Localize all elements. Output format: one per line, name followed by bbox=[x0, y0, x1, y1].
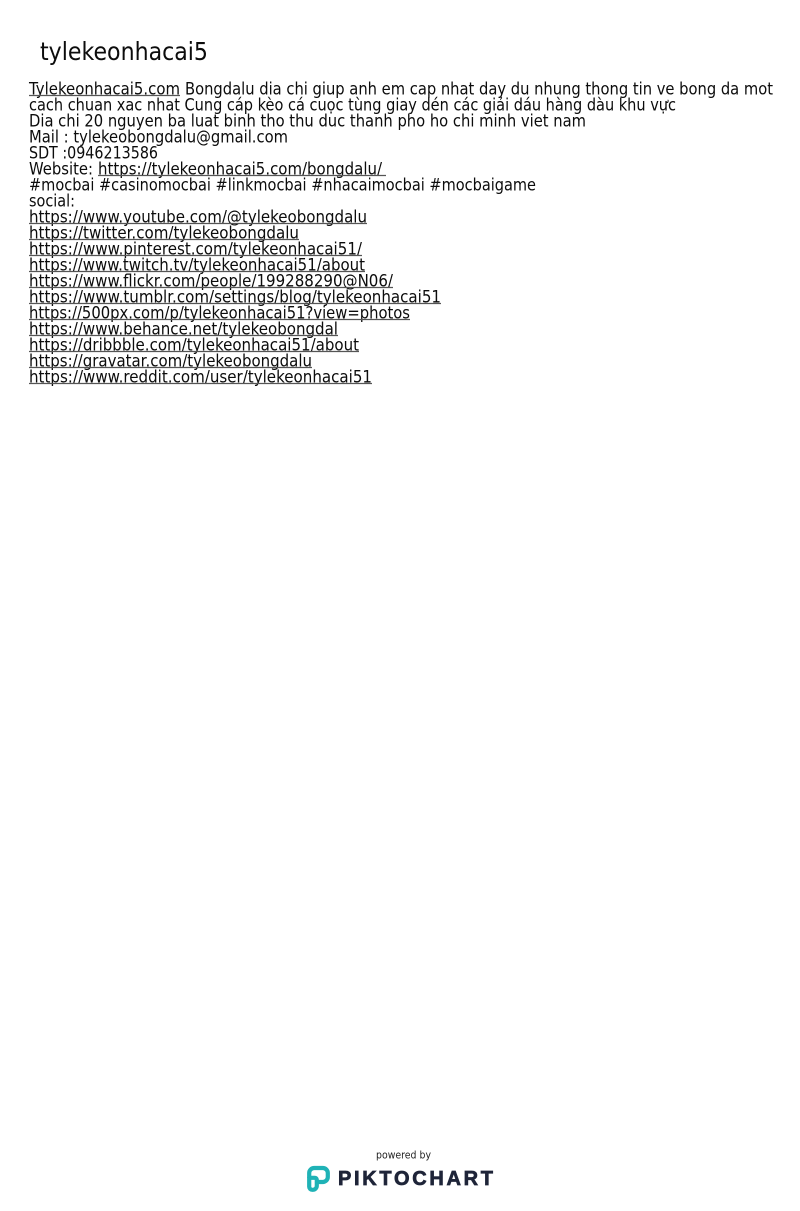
description line 2: cach chuan xac nhat Cung cáp kèo cá cuọc tùng giay dén các giải dáu hàng dàu khu vực bbox=[29, 96, 676, 114]
link: pinterest: https://www.pinterest.com/tylekeonhacai51/ bbox=[29, 240, 362, 258]
social label: social: bbox=[29, 192, 75, 210]
website link: https://tylekeonhacai5.com/bongdalu/ bbox=[98, 160, 382, 178]
address: Dia chi 20 nguyen ba luat binh tho thu duc thanh pho ho chi minh viet nam bbox=[29, 112, 586, 130]
link: site: Tylekeonhacai5.com bbox=[28, 80, 180, 98]
website label: Website: bbox=[29, 160, 93, 178]
icon: Piktochart logo bbox=[309, 1168, 328, 1190]
wordmark: PIKTOCHART bbox=[338, 1168, 493, 1190]
title: tylekeonhacai5 bbox=[40, 37, 208, 66]
hashtags: #mocbai #casinomocbai #linkmocbai #nhacaimocbai #mocbaigame bbox=[29, 176, 536, 194]
social links list bbox=[29, 208, 441, 386]
link: 500px: https://500px.com/p/tylekeonhacai51?view=photos bbox=[29, 304, 410, 322]
footer: powered by Piktochart bbox=[309, 1150, 493, 1190]
mail: Mail : tylekeobongdalu@gmail.com bbox=[29, 128, 288, 146]
text block: description and contact bbox=[28, 80, 774, 210]
powered by label: powered by bbox=[376, 1150, 431, 1162]
phone: SDT :0946213586 bbox=[29, 144, 158, 162]
link: tumblr: https://www.tumblr.com/settings/blog/tylekeonhacai51 bbox=[29, 288, 441, 306]
link: twitch: https://www.twitch.tv/tylekeonhacai51/about bbox=[29, 256, 366, 274]
link: youtube: https://www.youtube.com/@tylekeobongdalu bbox=[29, 208, 367, 226]
link: reddit: https://www.reddit.com/user/tylekeonhacai51 bbox=[29, 368, 372, 386]
link: flickr: https://www.flickr.com/people/199288290@N06/ bbox=[29, 272, 393, 290]
link: behance: https://www.behance.net/tylekeobongdal bbox=[29, 320, 338, 338]
link: dribbble: https://dribbble.com/tylekeonhacai51/about bbox=[29, 336, 360, 354]
link: twitter: https://twitter.com/tylekeobongdalu bbox=[29, 224, 299, 242]
link: gravatar: https://gravatar.com/tylekeobongdalu bbox=[29, 352, 312, 370]
